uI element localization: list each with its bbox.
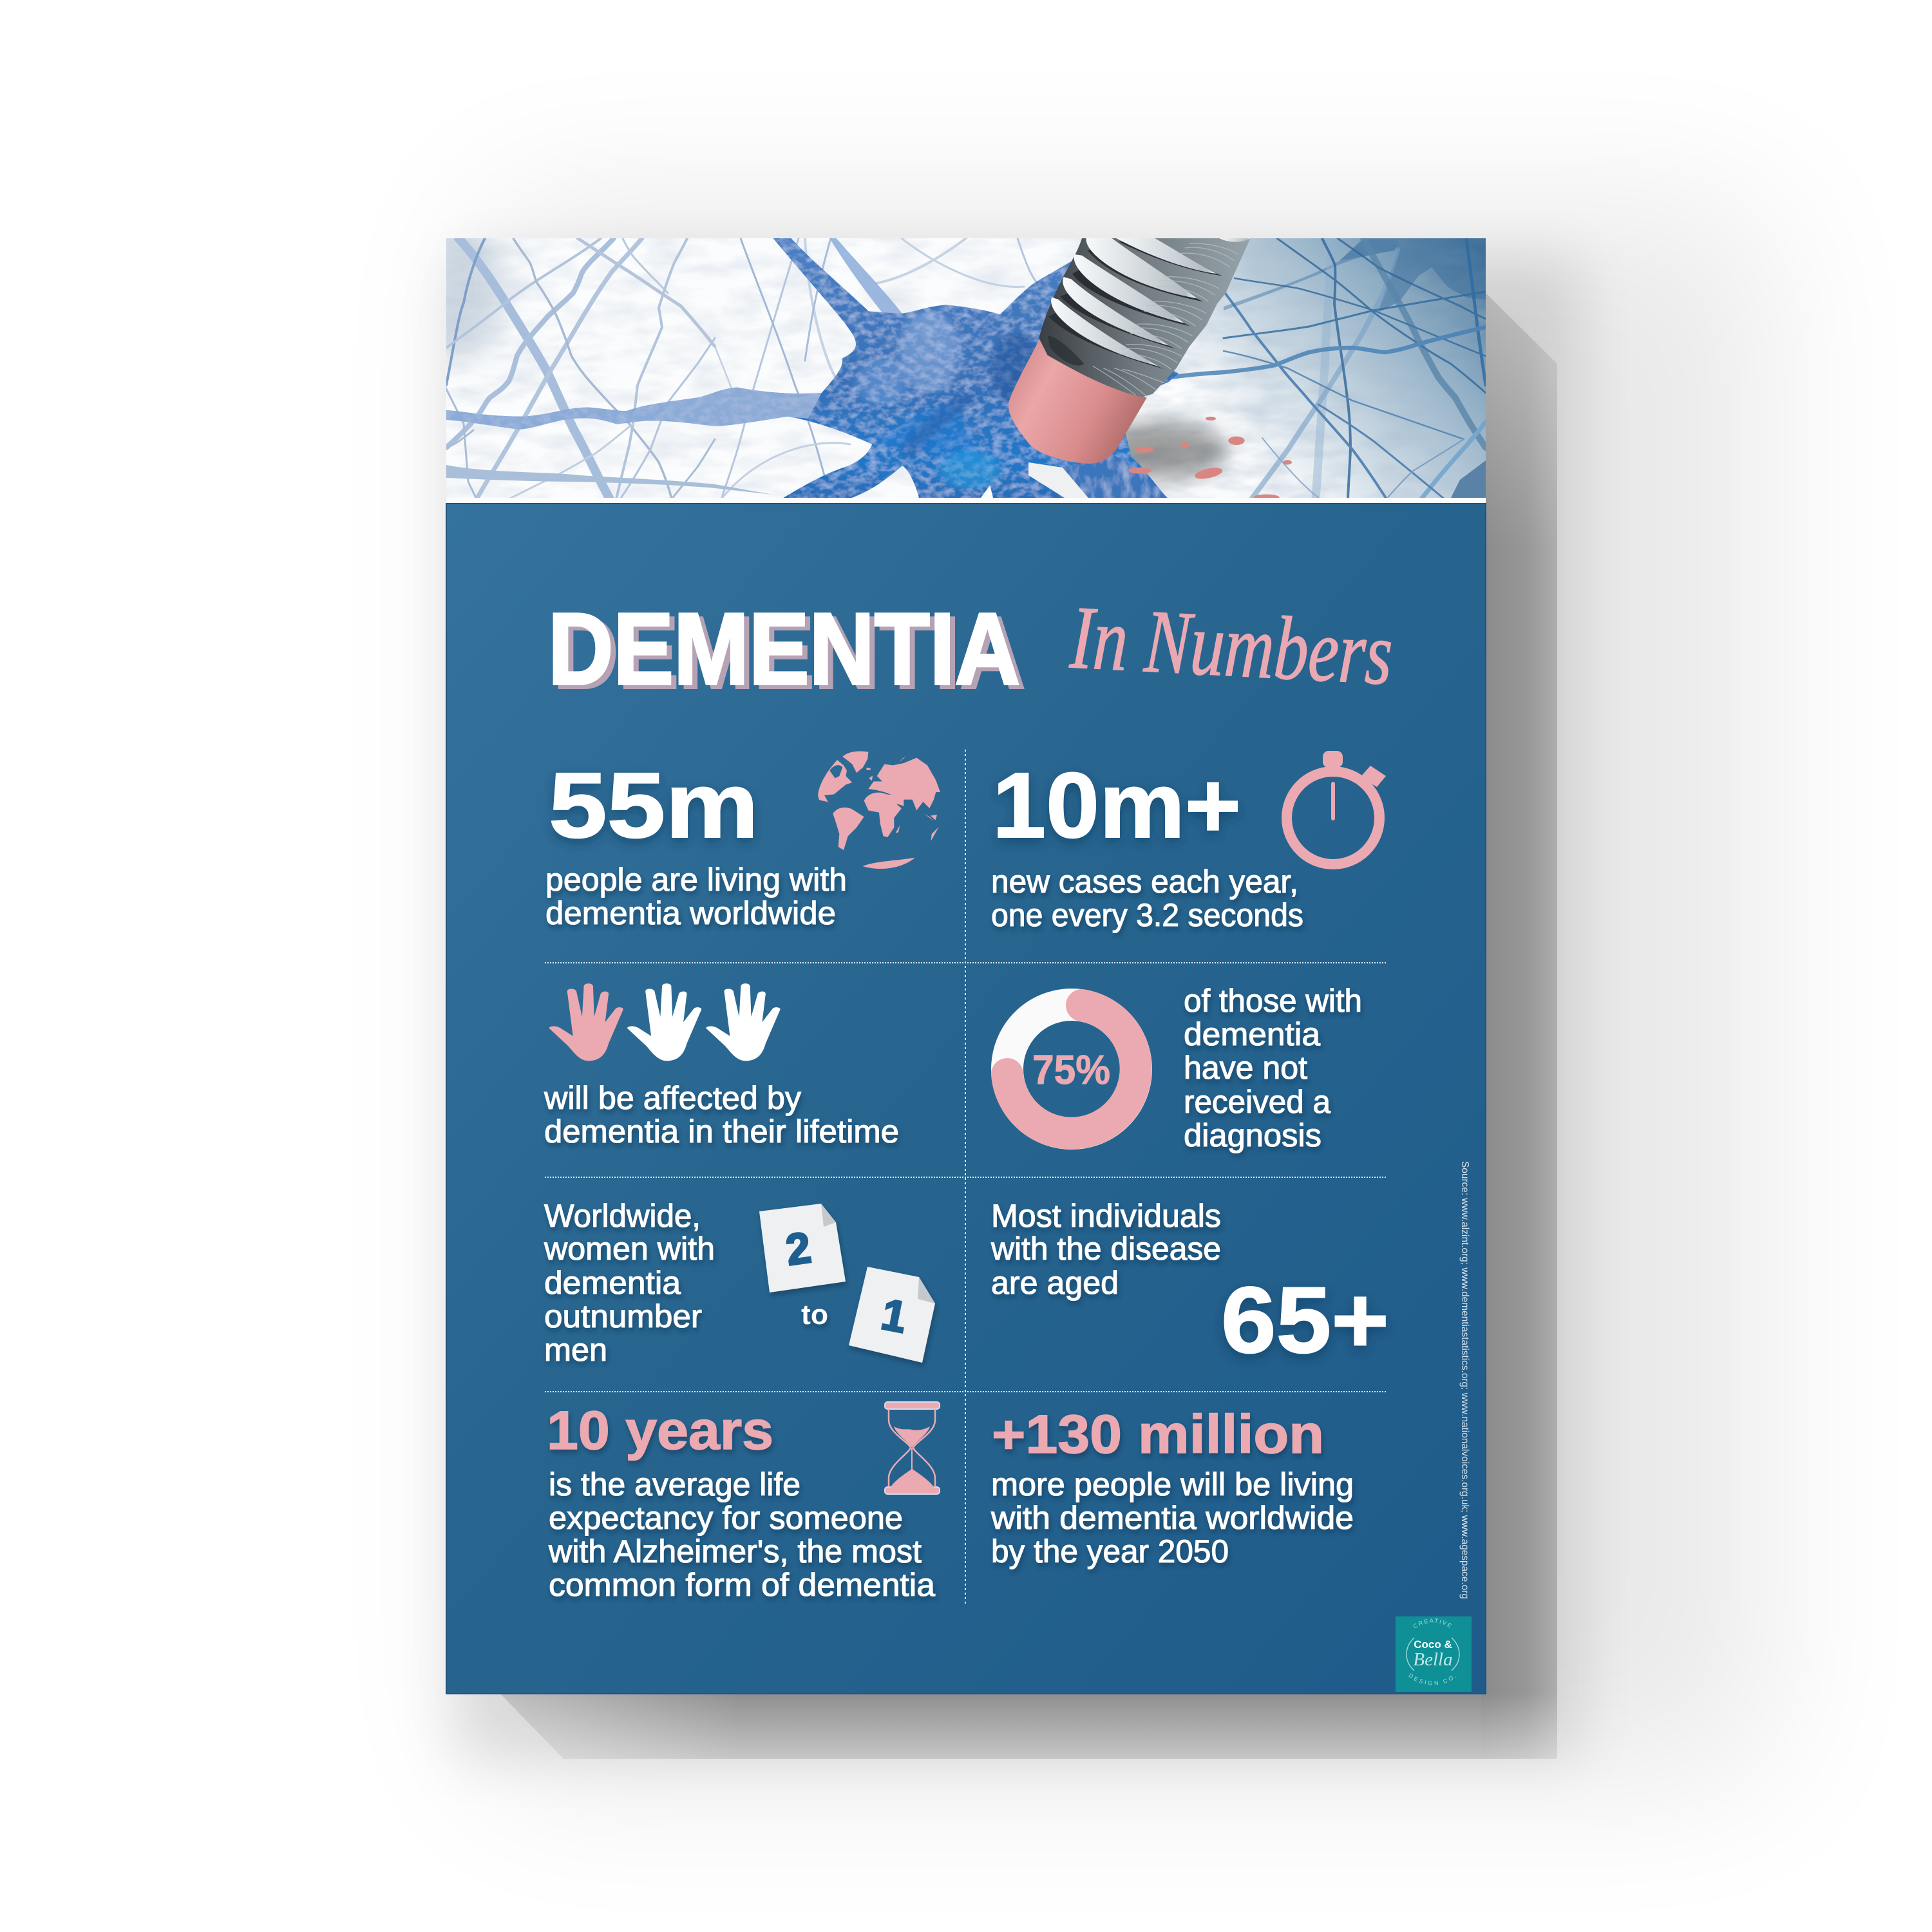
caption xyxy=(548,1466,935,1603)
stat: +130 million xyxy=(990,1404,1354,1569)
heading +130 million: +130 million xyxy=(992,1404,1324,1464)
thin nerve fibres right xyxy=(1162,238,1486,499)
caption: outnumber xyxy=(544,1298,702,1334)
caption: people are living with xyxy=(545,862,847,898)
caption: dementia xyxy=(544,1265,681,1301)
icon: three hands xyxy=(549,983,781,1061)
caption: dementia xyxy=(1184,1016,1320,1052)
right cast shadow xyxy=(1481,289,1557,1759)
caption xyxy=(1184,983,1362,1153)
logo: Bella xyxy=(1413,1649,1453,1670)
thin nerve fibres left xyxy=(444,238,1040,499)
caption: have not xyxy=(1184,1050,1307,1086)
caption: will be affected by xyxy=(544,1080,801,1116)
caption: of those with xyxy=(1184,983,1362,1019)
number 65+: 65+ xyxy=(1221,1267,1389,1372)
caption: is the average life xyxy=(549,1466,800,1502)
pale left dendrite xyxy=(444,388,822,430)
caption: dementia in their lifetime xyxy=(544,1113,899,1150)
stat: 2 to 1 xyxy=(544,1198,935,1368)
eraser ground shadow xyxy=(1092,422,1227,479)
pencil metal ferrule xyxy=(1039,238,1251,397)
donut chart 75% xyxy=(1007,1005,1136,1133)
ferrule rib shadows xyxy=(1048,242,1222,369)
icon: paper 1: 1 xyxy=(878,1290,911,1342)
lower right dendrite xyxy=(1063,454,1167,498)
donut chart 75%: 75% xyxy=(1032,1046,1110,1093)
caption: men xyxy=(544,1332,607,1368)
stat: 75% xyxy=(1007,983,1362,1153)
caption: with dementia worldwide xyxy=(990,1500,1354,1536)
poster xyxy=(446,238,1486,1694)
dark dendrite mass top right xyxy=(1340,238,1486,312)
logo: DESIGN CO. xyxy=(1407,1672,1459,1687)
pencil xyxy=(1009,238,1292,500)
caption xyxy=(990,1466,1354,1569)
caption: women with xyxy=(544,1231,715,1267)
caption xyxy=(991,864,1303,933)
photo banner: neuron erased by a pencil xyxy=(446,238,1486,498)
caption: with the disease xyxy=(990,1231,1221,1267)
title: In Numbers: In Numbers xyxy=(1068,587,1395,704)
caption: more people will be living xyxy=(991,1466,1354,1502)
stat: 10m+ xyxy=(991,751,1386,933)
main right axon xyxy=(1162,327,1486,379)
eraser crumbs xyxy=(1128,417,1292,500)
white gap between lower dendrites xyxy=(1028,462,1088,498)
caption: received a xyxy=(1184,1084,1331,1120)
number 55m: 55m xyxy=(549,753,759,857)
caption: with Alzheimer's, the most xyxy=(548,1533,922,1569)
title: DEMENTIA: DEMENTIA xyxy=(553,596,1025,710)
stat: 55m xyxy=(545,751,940,931)
caption: Worldwide, xyxy=(544,1198,701,1234)
caption xyxy=(990,1198,1221,1301)
icon: globe xyxy=(818,751,940,869)
neuron cell body xyxy=(444,238,1179,499)
caption: by the year 2050 xyxy=(991,1533,1229,1569)
ferrule silver ribs xyxy=(1051,238,1251,366)
label: to: to xyxy=(801,1299,828,1331)
caption: diagnosis xyxy=(1184,1117,1321,1153)
logo: Coco & xyxy=(1414,1638,1452,1651)
caption xyxy=(544,1080,899,1150)
caption: Most individuals xyxy=(991,1198,1221,1234)
caption: one every 3.2 seconds xyxy=(991,897,1303,933)
bottom cast shadow xyxy=(499,1692,1481,1759)
number 10m+: 10m+ xyxy=(992,753,1241,857)
icon: hourglass xyxy=(885,1402,940,1494)
icon: paper 1 xyxy=(849,1267,935,1363)
stat: 1 in 3 hands xyxy=(544,983,899,1150)
ferrule engraved stripes xyxy=(1093,243,1238,396)
icon: paper 2: 2 xyxy=(783,1223,814,1274)
logo xyxy=(1396,1616,1472,1692)
source note: Source: www.alzint.org; www.dementiastatistics.org; www.nationalvoices.org.uk; www.agespace.org xyxy=(1459,1161,1470,1599)
title: DEMENTIA: DEMENTIA xyxy=(548,592,1020,706)
pencil eraser xyxy=(1009,339,1147,464)
caption: common form of dementia xyxy=(549,1567,935,1603)
logo: CREATIVE xyxy=(1413,1618,1452,1628)
icon: paper 2 xyxy=(759,1204,846,1293)
soft wide ambient shadow xyxy=(489,206,1765,1777)
icon: stopwatch xyxy=(1287,751,1386,864)
stat: 65+ xyxy=(990,1198,1389,1372)
caption xyxy=(545,862,847,931)
close ambient shadow xyxy=(454,258,1578,1758)
caption: new cases each year, xyxy=(991,864,1298,900)
white strip under banner xyxy=(446,498,1486,504)
blue panel xyxy=(446,504,1486,1694)
wide pale fibre, lower left xyxy=(446,465,773,495)
caption: are aged xyxy=(991,1265,1119,1301)
caption: dementia worldwide xyxy=(545,895,836,931)
stat: 10 years xyxy=(547,1400,940,1603)
caption xyxy=(544,1198,715,1368)
caption: expectancy for someone xyxy=(549,1500,903,1536)
grid dividers xyxy=(545,750,1386,1604)
heading 10 years: 10 years xyxy=(547,1400,773,1461)
